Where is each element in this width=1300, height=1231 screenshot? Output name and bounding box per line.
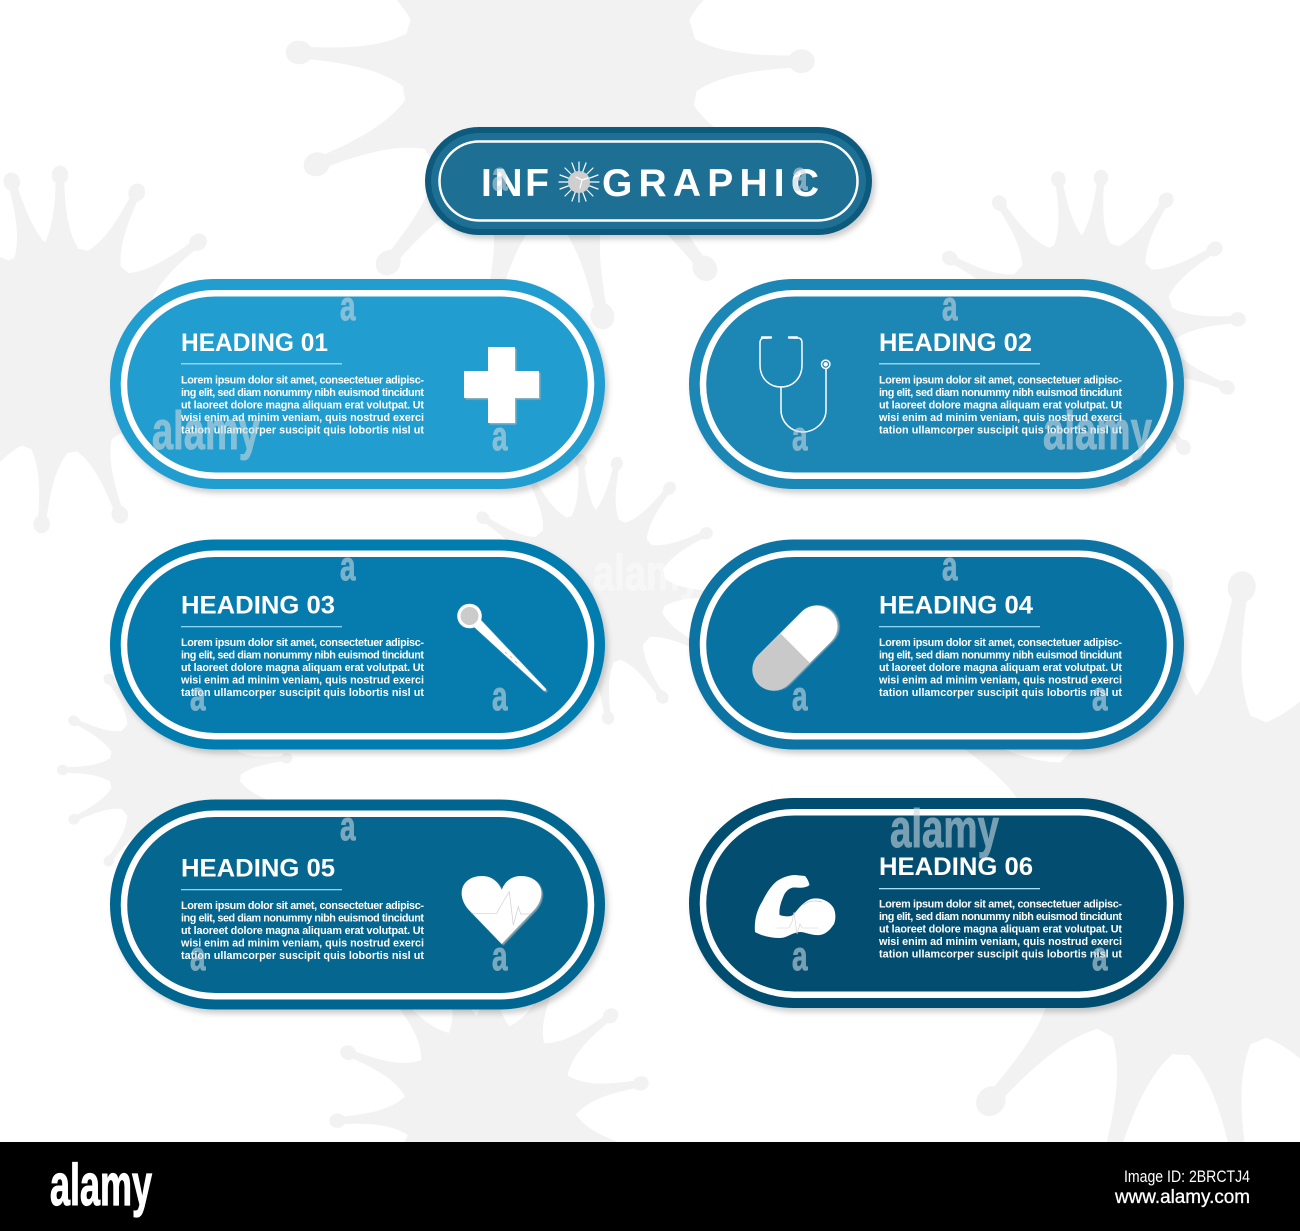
panel 4: [689, 540, 1184, 750]
watermark marks over panels: [152, 154, 1152, 979]
body text 02: [878, 374, 1122, 436]
body text 04: ut laoreet dolore magna aliquam erat volutpat. Ut: [879, 662, 1122, 674]
watermark marks over panels: a: [340, 544, 356, 589]
body text 04: ing elit, sed diam nonummy nibh euismod tincidunt: [879, 650, 1122, 662]
body text 03: ing elit, sed diam nonummy nibh euismod tincidunt: [181, 650, 424, 662]
background watermark: alamy: [593, 545, 701, 601]
body text 04: [878, 637, 1122, 699]
watermark marks over panels: alamy: [152, 401, 260, 461]
body text 02: tation ullamcorper suscipit quis lobortis nisl ut: [879, 424, 1122, 436]
body text 05: tation ullamcorper suscipit quis lobortis nisl ut: [181, 950, 424, 962]
watermark marks over panels: a: [792, 154, 808, 199]
body text 06: Lorem ipsum dolor sit amet, consectetuer adipisc-: [879, 899, 1122, 911]
footer bar: [0, 1142, 1300, 1231]
body text 01: [180, 374, 424, 436]
background: virus lower right: [824, 516, 1300, 1231]
watermark marks over panels: alamy: [1043, 401, 1152, 461]
icon: dental mirror: [457, 604, 546, 691]
watermark marks over panels: a: [492, 414, 508, 459]
background: virus centre: [427, 428, 753, 753]
image id: Image ID: 2BRCTJ4: [1124, 1167, 1250, 1186]
body text 03: [180, 637, 424, 699]
watermark marks over panels: a: [340, 804, 356, 849]
body text 01: wisi enim ad minim veniam, quis nostrud exerci: [180, 412, 424, 424]
body text 02: Lorem ipsum dolor sit amet, consectetuer adipisc-: [879, 374, 1122, 386]
watermark marks over panels: a: [942, 284, 958, 329]
title text right: GRAPHIC: [602, 162, 819, 205]
body text 05: ing elit, sed diam nonummy nibh euismod tincidunt: [181, 912, 424, 924]
panel 3: [110, 540, 605, 750]
body text 06: ing elit, sed diam nonummy nibh euismod tincidunt: [879, 911, 1122, 923]
icon: flexed arm: [755, 875, 835, 938]
body text 03: Lorem ipsum dolor sit amet, consectetuer adipisc-: [181, 637, 424, 649]
heading 05: HEADING 05: [181, 854, 335, 882]
body text 01: tation ullamcorper suscipit quis lobortis nisl ut: [181, 424, 424, 436]
body text 01: ut laoreet dolore magna aliquam erat volutpat. Ut: [181, 400, 424, 412]
icon: medical cross: [464, 347, 539, 423]
body text 06: tation ullamcorper suscipit quis lobortis nisl ut: [879, 949, 1122, 961]
background: virus left: [0, 165, 246, 536]
heading 04: HEADING 04: [879, 592, 1033, 620]
body text 03: tation ullamcorper suscipit quis lobortis nisl ut: [181, 687, 424, 699]
watermark marks over panels: a: [942, 544, 958, 589]
body text 02: wisi enim ad minim veniam, quis nostrud exerci: [878, 412, 1122, 424]
panel 2: [689, 279, 1184, 489]
body text 06: ut laoreet dolore magna aliquam erat volutpat. Ut: [879, 924, 1122, 936]
title virus icon: [559, 162, 599, 202]
icon: capsule: [744, 597, 846, 699]
watermark marks over panels: a: [792, 414, 808, 459]
website: www.alamy.com: [1114, 1187, 1250, 1208]
body text 04: tation ullamcorper suscipit quis lobortis nisl ut: [879, 687, 1122, 699]
body text 02: ing elit, sed diam nonummy nibh euismod tincidunt: [879, 387, 1122, 399]
watermark marks over panels: a: [190, 674, 206, 719]
body text 05: ut laoreet dolore magna aliquam erat volutpat. Ut: [181, 925, 424, 937]
footer logo: alamy: [50, 1153, 152, 1218]
background: virus top centre: [248, 0, 852, 372]
body text 01: Lorem ipsum dolor sit amet, consectetuer adipisc-: [181, 374, 424, 386]
title banner: [425, 127, 872, 235]
background: virus bottom centre: [328, 949, 653, 1231]
background: virus lower left: [48, 644, 302, 897]
body text 05: wisi enim ad minim veniam, quis nostrud exerci: [180, 938, 424, 950]
watermark marks over panels: a: [340, 284, 356, 329]
body text 05: Lorem ipsum dolor sit amet, consectetuer adipisc-: [181, 900, 424, 912]
heading 06: HEADING 06: [879, 853, 1033, 881]
body text 01: ing elit, sed diam nonummy nibh euismod tincidunt: [181, 387, 424, 399]
body text 06: [878, 899, 1122, 961]
body text 02: ut laoreet dolore magna aliquam erat volutpat. Ut: [879, 400, 1122, 412]
body text 04: wisi enim ad minim veniam, quis nostrud exerci: [878, 674, 1122, 686]
watermark marks over panels: alamy: [890, 799, 999, 859]
watermark marks over panels: a: [492, 154, 508, 199]
body text 03: ut laoreet dolore magna aliquam erat volutpat. Ut: [181, 662, 424, 674]
watermark marks over panels: a: [190, 934, 206, 979]
panel 6: [689, 798, 1184, 1008]
panel 5: [110, 800, 605, 1010]
body text 04: Lorem ipsum dolor sit amet, consectetuer adipisc-: [879, 637, 1122, 649]
watermark marks over panels: a: [1092, 934, 1108, 979]
body text 06: wisi enim ad minim veniam, quis nostrud exerci: [878, 936, 1122, 948]
panel 1: [110, 279, 605, 489]
body text 05: [180, 900, 424, 962]
icon: heart with pulse: [462, 876, 541, 944]
heading 01: HEADING 01: [181, 329, 328, 357]
watermark marks over panels: a: [492, 934, 508, 979]
body text 03: wisi enim ad minim veniam, quis nostrud exerci: [180, 674, 424, 686]
heading 03: HEADING 03: [181, 592, 335, 620]
watermark marks over panels: a: [492, 674, 508, 719]
heading 02: HEADING 02: [879, 329, 1032, 357]
title text left: INF: [481, 162, 549, 205]
watermark marks over panels: a: [792, 934, 808, 979]
icon: stethoscope: [760, 338, 830, 432]
watermark marks over panels: a: [792, 674, 808, 719]
background: virus top right: [907, 153, 1264, 509]
watermark marks over panels: a: [1092, 674, 1108, 719]
